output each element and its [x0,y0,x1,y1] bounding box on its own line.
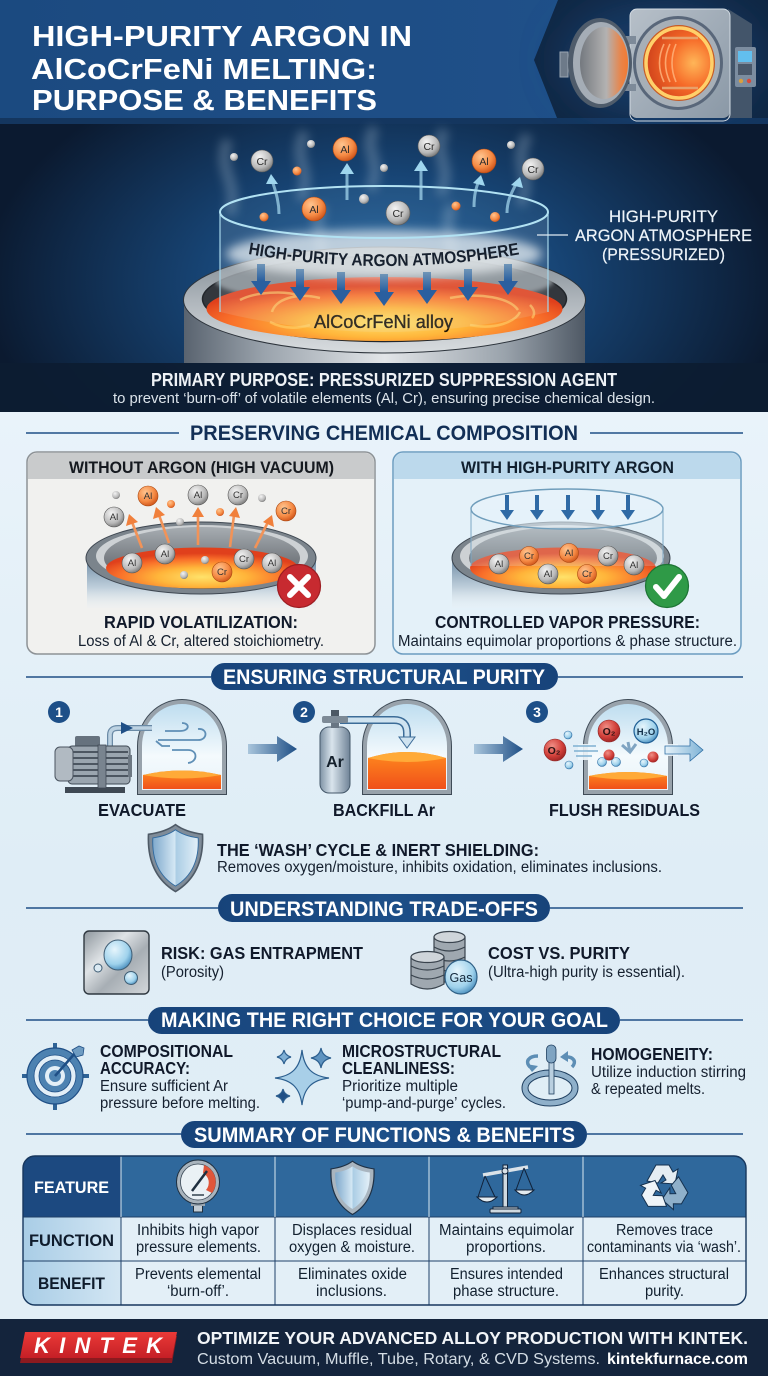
step 1: evacuate: 1 [55,704,63,720]
wash cycle note [148,825,662,892]
call to action: OPTIMIZE YOUR ADVANCED ALLOY PRODUCTION WITH KINTEK. [197,1328,748,1348]
risk: gas entrapment: RISK: GAS ENTRAPMENT [161,943,363,963]
wash cycle note: THE ‘WASH’ CYCLE & INERT SHIELDING: [217,840,539,860]
goal: compositional accuracy: ACCURACY: [100,1058,190,1078]
volatile atoms [230,135,544,225]
primary purpose caption: to prevent ‘burn-off’ of volatile elements (Al, Cr), ensuring precise chemical design. [113,390,655,407]
title: HIGH-PURITY ARGON IN [32,21,412,53]
icon: sparkles [275,1048,331,1105]
crucible with glass atmosphere: Al [630,560,638,571]
step 3: flush residuals: FLUSH RESIDUALS [549,800,700,820]
heading pill: SUMMARY OF FUNCTIONS & BENEFITS [194,1124,575,1147]
benefit row text: ‘burn-off’. [167,1283,229,1300]
call to action: Custom Vacuum, Muffle, Tube, Rotary, & CVD Systems. [197,1351,600,1368]
goal: homogeneity: Utilize induction stirring [591,1064,746,1081]
goal: microstructural cleanliness: Prioritize multiple [342,1078,458,1095]
goal: microstructural cleanliness [275,1041,506,1112]
cost vs purity: Gas [450,971,472,985]
header banner [0,0,768,124]
icon: shield [331,1161,374,1215]
goal: compositional accuracy: pressure before melting. [100,1095,260,1112]
benefit row text: Enhances structural [599,1266,729,1283]
primary purpose caption: PRIMARY PURPOSE: PRESSURIZED SUPPRESSION AGENT [151,370,617,390]
goal: microstructural cleanliness: ‘pump-and-purge’ cycles. [342,1095,506,1112]
benefit row text [135,1266,729,1300]
icon: green check badge [646,564,688,608]
function row text [136,1222,741,1256]
call to action: kintekfurnace.com [607,1351,748,1368]
arrow: step 2 to 3 [474,736,523,762]
panel: with argon: Maintains equimolar proportions & phase structure. [398,633,737,650]
heading pill [26,1121,743,1148]
step 3: flush residuals [526,701,703,820]
glass cylinder [220,186,548,332]
step 3: flush residuals: 3 [533,704,541,720]
title: AlCoCrFeNi MELTING: [31,54,377,86]
icon: shield [148,825,203,892]
crucible with escaping atoms: Al [110,512,118,523]
argon cylinder: Ar [326,754,344,771]
title [31,21,412,117]
crucible [184,247,586,363]
residual molecules [544,719,678,769]
crucible with glass atmosphere: Cr [524,551,534,562]
steam [224,128,528,280]
crucible with escaping atoms: Cr [217,567,227,578]
volatile atoms: Cr [256,156,268,168]
crucible with escaping atoms: Al [268,558,276,569]
step 2: backfill argon: 2 [300,704,308,720]
step 2: backfill argon: BACKFILL Ar [333,800,435,820]
chamber [586,702,670,792]
panel: without argon: WITHOUT ARGON (HIGH VACUUM) [69,458,334,477]
panel: without argon: RAPID VOLATILIZATION: [104,612,298,632]
logo: KINTEK [34,1333,164,1358]
icon: stirring [525,1045,575,1103]
atmosphere callout: ARGON ATMOSPHERE [575,226,752,245]
atmosphere callout: (PRESSURIZED) [602,245,725,264]
step 1: evacuate [48,701,224,820]
cylinder curved label [248,254,521,266]
row labels: FUNCTION [29,1231,114,1250]
benefit row text: purity. [645,1283,684,1300]
risk: gas entrapment [84,931,363,994]
heading pill: MAKING THE RIGHT CHOICE FOR YOUR GOAL [161,1009,608,1032]
volatile atoms: Al [309,204,319,216]
heading: PRESERVING CHEMICAL COMPOSITION [190,422,578,445]
footer [0,1319,768,1376]
goal: homogeneity: HOMOGENEITY: [591,1044,713,1064]
pipe and arrow [340,720,415,748]
goal: compositional accuracy [22,1041,260,1112]
step 1: evacuate: EVACUATE [98,800,186,820]
section: understanding trade-offs [26,894,743,994]
section: summary of functions and benefits [23,1121,746,1305]
swirl lines [156,723,206,763]
crucible with glass atmosphere: Cr [603,551,613,562]
volatile atoms: Cr [423,141,435,153]
panel: with argon: WITH HIGH-PURITY ARGON [461,458,674,477]
crucible with glass atmosphere: Al [565,548,573,559]
volatile atoms: Al [479,156,489,168]
benefit row text: inclusions. [316,1283,387,1300]
volatile atoms: Cr [392,208,404,220]
risk: gas entrapment: (Porosity) [161,964,224,981]
call to action [197,1328,748,1368]
goal: compositional accuracy: Ensure sufficient Ar [100,1078,228,1095]
crucible with glass atmosphere: Al [544,569,552,580]
icon: target [22,1043,89,1110]
icon: pressure gauge [176,1160,220,1212]
crucible with glass atmosphere: Cr [582,569,592,580]
arrow: step 1 to 2 [248,736,297,762]
volatile atoms: Cr [527,164,539,176]
section: making the right choice [22,1007,746,1112]
logo [20,1332,177,1363]
function row text: Removes trace [616,1222,713,1239]
atmosphere callout: HIGH-PURITY [609,207,718,226]
goal: compositional accuracy: COMPOSITIONAL [100,1041,233,1061]
function row text: proportions. [466,1239,546,1256]
icon: coin stacks and gas [411,932,477,994]
crucible with escaping atoms: Al [194,490,202,501]
crucible with escaping atoms: Cr [239,554,249,565]
rising arrows [272,166,517,214]
title: PURPOSE & BENEFITS [32,85,377,117]
crucible with escaping atoms: Cr [233,490,243,501]
heading pill [26,894,743,922]
goal: homogeneity: & repeated melts. [591,1081,705,1098]
function row text: Maintains equimolar [439,1222,574,1239]
heading pill [26,1007,743,1034]
page background [0,412,768,1320]
crucible with escaping atoms: Al [161,549,169,560]
heading pill: UNDERSTANDING TRADE-OFFS [230,898,538,921]
benefit row text: Prevents elemental [135,1266,261,1283]
wash cycle note: Removes oxygen/moisture, inhibits oxidation, eliminates inclusions. [217,859,662,876]
panel: with argon: CONTROLLED VAPOR PRESSURE: [435,612,700,632]
panel: without argon: Loss of Al & Cr, altered stoichiometry. [78,633,324,650]
volatile atoms: Al [340,144,350,156]
primary purpose caption [0,363,768,412]
vacuum pump [55,722,152,793]
panel: without argon [27,452,375,654]
panel: with argon [393,452,741,654]
residual molecules: H₂O [637,727,655,738]
summary table [23,1156,746,1305]
downward argon arrows [251,264,518,306]
icon: balance scale [477,1165,534,1213]
benefit row text: Eliminates oxide [298,1266,407,1283]
crucible with escaping atoms: Al [144,491,152,502]
argon cylinder [320,710,350,793]
icon: recycle arrows [637,1165,692,1214]
cost vs purity [411,932,685,994]
header furnace image panel [534,0,768,121]
function row text: pressure elements. [136,1239,261,1256]
row labels [29,1178,114,1293]
hero: argon atmosphere over melt: HIGH-PURITY ARGON ATMOSPHERE [249,242,519,266]
crucible with glass atmosphere [452,489,670,608]
function row text: Displaces residual [292,1222,412,1239]
cost vs purity: COST VS. PURITY [488,943,630,963]
row labels: FEATURE [34,1178,109,1197]
goal: microstructural cleanliness: CLEANLINESS: [342,1058,455,1078]
section: ensuring structural purity [26,663,743,892]
section: preserving chemical composition [26,422,743,654]
hero: argon atmosphere over melt [0,124,768,412]
residual molecules: O₂ [548,745,561,757]
chamber [365,702,449,792]
step 2: backfill argon [293,701,449,820]
function row text: Inhibits high vapor [137,1222,259,1239]
goal: homogeneity [525,1044,746,1103]
heading pill [26,663,743,690]
goal: microstructural cleanliness: MICROSTRUCTURAL [342,1041,501,1061]
chamber [140,702,224,792]
function row text: contaminants via ‘wash’. [587,1239,741,1256]
atmosphere callout [537,207,752,264]
residual molecules: O₂ [603,726,616,738]
crucible with glass atmosphere: Al [495,559,503,570]
icon: porous metal [84,931,149,994]
alloy label: AlCoCrFeNi alloy [314,312,453,332]
crucible with escaping atoms: Al [128,558,136,569]
benefit row text: phase structure. [453,1283,559,1300]
cost vs purity: (Ultra-high purity is essential). [488,964,685,981]
row labels: BENEFIT [38,1274,106,1293]
crucible with escaping atoms: Cr [281,506,291,517]
function row text: oxygen & moisture. [289,1239,415,1256]
exit arrow [665,739,703,761]
crucible with escaping atoms [86,485,316,608]
icon: red cross badge [278,564,320,608]
heading pill: ENSURING STRUCTURAL PURITY [223,666,545,689]
benefit row text: Ensures intended [450,1266,563,1283]
